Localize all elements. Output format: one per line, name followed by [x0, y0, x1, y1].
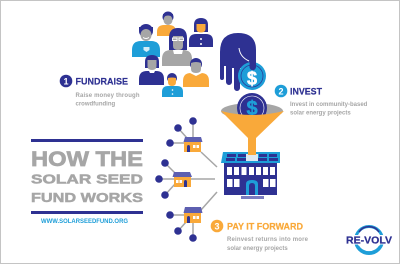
- step 3: pay it forward: Reinvest returns into more: [227, 237, 309, 243]
- diagram: house network middle: [155, 159, 215, 199]
- diagram: house network top: [166, 117, 217, 167]
- step 3: pay it forward: solar energy projects: [227, 246, 288, 252]
- step 3: pay it forward: PAY IT FORWARD: [227, 222, 303, 232]
- step 1: fundraise: Raise money through: [76, 93, 140, 99]
- person: navy shirt top right: [189, 18, 213, 47]
- title block: [31, 139, 144, 225]
- icon: hand dropping coin: [220, 33, 266, 91]
- step 3: pay it forward: [211, 220, 309, 252]
- illustration: crowd of funders: [132, 12, 213, 97]
- step 2: invest: Invest in community-based: [290, 102, 368, 108]
- step 1: fundraise: 1: [63, 76, 69, 86]
- step 2: invest: 2: [278, 86, 284, 96]
- icon: funnel with coin: [221, 93, 284, 155]
- title: solar seed: SOLAR SEED: [31, 172, 143, 186]
- step 1: fundraise: crowdfunding: [76, 102, 115, 108]
- person: grey shirt centre: [162, 28, 192, 66]
- step 2: invest: [275, 85, 368, 116]
- title: how the: HOW THE: [31, 148, 143, 171]
- icon: falling dollar coin: $: [247, 68, 257, 88]
- person: orange shirt top: [157, 12, 176, 36]
- icon: solar-panel school building: [221, 152, 280, 199]
- logo: RE-VOLV: RE-VOLV: [346, 236, 392, 246]
- step 2: invest: solar energy projects: [290, 110, 351, 116]
- title: fund works: FUND WORKS: [31, 190, 144, 205]
- person: navy shirt left: [139, 55, 164, 85]
- person: blue shirt: [132, 24, 160, 57]
- logo: RE-VOLV: [345, 226, 394, 254]
- step 2: invest: INVEST: [290, 86, 322, 96]
- diagram: house network bottom: [166, 192, 217, 242]
- step 1: fundraise: FUNDRAISE: [76, 76, 128, 86]
- step 1: fundraise: [60, 75, 140, 108]
- icon: dollar coin entering funnel: $: [246, 98, 258, 120]
- person: orange shirt right: [183, 58, 209, 87]
- website url: WWW.SOLARSEEDFUND.ORG: [41, 218, 128, 225]
- step 3: pay it forward: 3: [214, 222, 220, 232]
- person: blue shirt bottom: [162, 73, 183, 97]
